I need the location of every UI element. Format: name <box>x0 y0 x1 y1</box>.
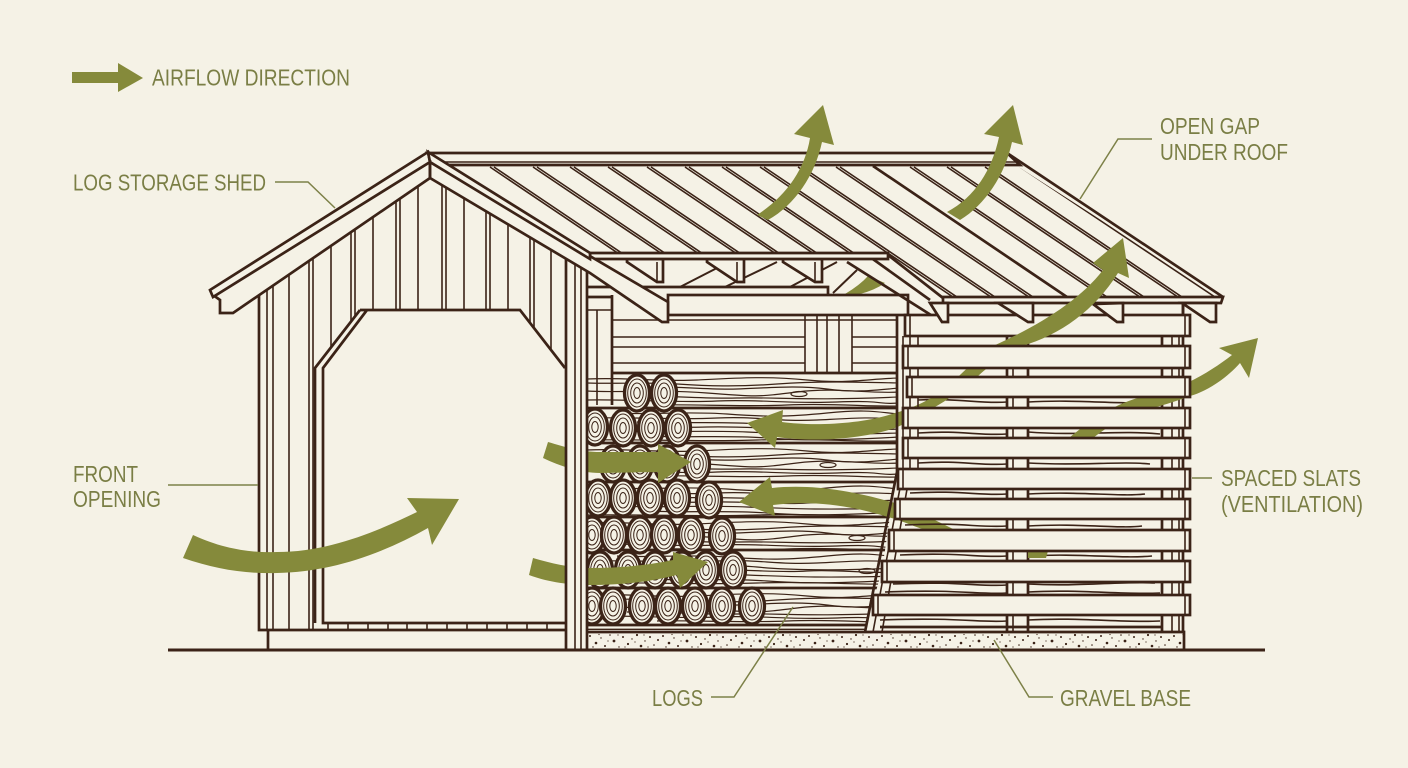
arrow: through lower log stack <box>529 552 708 588</box>
lower eave beam <box>590 253 888 259</box>
label: log storage shed: LOG STORAGE SHED <box>73 170 266 196</box>
label: front opening <box>73 461 258 512</box>
logs: long side view with grain <box>587 378 899 630</box>
arrow: small residual through slats <box>1028 551 1048 558</box>
gravel base <box>587 632 1184 650</box>
arrow: through upper log stack <box>543 442 691 483</box>
roof seams <box>490 166 1215 297</box>
spaced slats <box>873 346 1190 615</box>
label: open gap under roof <box>1080 113 1288 199</box>
label: front opening: OPENING <box>73 486 161 512</box>
label: gravel base: GRAVEL BASE <box>1060 685 1191 711</box>
right eave <box>943 297 1223 303</box>
ground line <box>168 648 1265 652</box>
roof front diagonal edge <box>847 255 943 322</box>
label: open gap under roof: UNDER ROOF <box>1160 139 1288 165</box>
arrow: long curve from logs up to roof <box>747 238 1129 448</box>
label: logs <box>652 607 793 711</box>
legend label: AIRFLOW DIRECTION <box>152 64 350 90</box>
arrow: up from roof, left <box>757 105 834 220</box>
right roof edge <box>1007 153 1223 297</box>
arrow: leftward over lower logs <box>739 477 955 530</box>
eave rafter tails <box>930 303 1216 322</box>
left slat wall frame <box>865 315 918 632</box>
label: gravel base <box>994 640 1191 711</box>
arrow: rightward out through slats <box>1069 338 1258 438</box>
label: front opening: FRONT <box>73 461 138 487</box>
front gable barge boards <box>210 152 668 322</box>
label: spaced slats: SPACED SLATS <box>1221 465 1361 491</box>
label: spaced slats <box>1192 465 1363 517</box>
shed illustration <box>168 152 1265 650</box>
arrow: into front opening <box>183 498 459 573</box>
label: spaced slats: (VENTILATION) <box>1221 491 1363 517</box>
ridge cap <box>428 153 1020 165</box>
back wall siding and inner post <box>587 295 897 405</box>
arrow: up from roof, right <box>947 105 1023 220</box>
arrow: small segment in roof gap <box>845 276 885 294</box>
log ends stack <box>580 375 764 624</box>
main corner post <box>566 258 587 650</box>
slat wall posts and gaps <box>880 303 1190 632</box>
gable end wall and front opening <box>259 178 566 650</box>
roof trusses and beams <box>588 259 908 315</box>
label: open gap under roof: OPEN GAP <box>1160 113 1260 139</box>
label: log storage shed <box>73 170 335 208</box>
metal roof panel <box>428 153 1223 322</box>
legend arrow <box>72 63 143 92</box>
label: logs: LOGS <box>652 685 703 711</box>
legend: airflow direction <box>72 63 350 92</box>
